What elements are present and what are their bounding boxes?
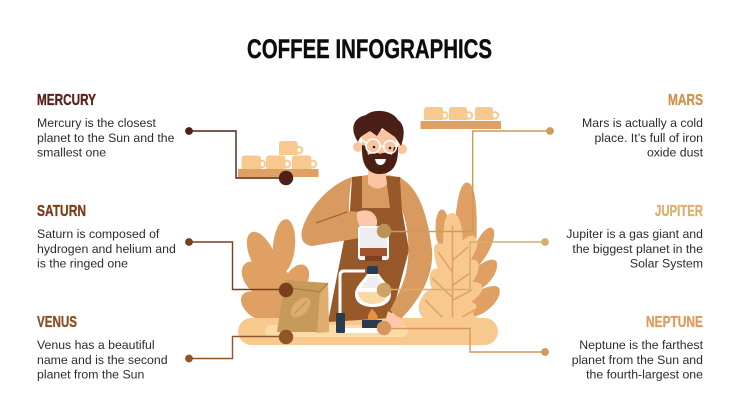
text block: Neptune: the fourth-largest one	[586, 368, 703, 382]
text block: Jupiter: Solar System	[630, 256, 703, 270]
illustration: right shelf with cups	[420, 107, 501, 129]
connector: Mercury	[186, 128, 293, 185]
text block: Venus	[37, 314, 168, 382]
neck	[368, 165, 387, 188]
text block: Saturn	[37, 203, 176, 270]
text block: Saturn: is the ringed one	[37, 256, 128, 270]
illustration: left plant	[235, 218, 315, 327]
text block: Saturn: Saturn is composed of	[37, 227, 160, 241]
face	[362, 130, 396, 172]
text block: Mercury: planet to the Sun and the	[37, 131, 175, 145]
ears	[353, 142, 363, 152]
left arm	[301, 177, 360, 246]
hair	[353, 111, 404, 146]
illustration: man	[301, 111, 432, 328]
apron	[328, 176, 409, 322]
text block: Jupiter: the biggest planet in the	[572, 242, 703, 256]
text block: Mercury	[37, 92, 175, 160]
illustration: left shelf with cups	[238, 141, 318, 177]
beard	[362, 145, 398, 174]
text block: Mars: oxide dust	[647, 146, 704, 160]
shirt torso	[350, 175, 402, 240]
title: COFFEE INFOGRAPHICS	[247, 34, 492, 64]
illustration: right plant back leaves	[437, 184, 498, 315]
text block: Venus: Venus has a beautiful	[37, 338, 155, 352]
text block: Saturn: hydrogen and helium and	[37, 242, 176, 256]
text block: Neptune: Neptune is the farthest	[579, 338, 704, 352]
text block: Jupiter: Jupiter is a gas giant and	[566, 227, 703, 241]
text block: Mars	[582, 92, 704, 160]
connector: Venus	[186, 330, 293, 362]
glasses	[360, 138, 396, 153]
text block: Neptune	[572, 314, 704, 382]
text block: Neptune: planet from the Sun and	[572, 353, 703, 367]
connector: Mars	[377, 128, 553, 238]
illustration: table	[238, 318, 498, 345]
text block: Venus: VENUS	[37, 314, 77, 331]
text block: Venus: planet from the Sun	[37, 368, 144, 382]
illustration: right plant front leaf	[421, 215, 480, 319]
text block: Saturn: SATURN	[37, 203, 86, 220]
text block: Neptune: NEPTUNE	[646, 314, 703, 331]
eyes	[373, 146, 375, 148]
connector: Jupiter	[377, 239, 548, 297]
text block: Mercury: Mercury is the closest	[37, 116, 156, 130]
illustration: coffee syphon	[336, 226, 391, 333]
text block: Mars: place. It’s full of iron	[595, 131, 703, 145]
text block: Venus: name and is the second	[37, 353, 168, 367]
right arm	[390, 178, 432, 320]
text block: Jupiter	[566, 203, 703, 270]
text block: Mars: Mars is actually a cold	[582, 116, 703, 130]
text block: Mercury: MERCURY	[37, 92, 96, 109]
connector: Saturn	[186, 239, 293, 297]
mouth	[375, 159, 386, 165]
connector: Neptune	[377, 321, 548, 355]
illustration: coffee bag	[277, 280, 329, 333]
text block: Mercury: smallest one	[37, 146, 106, 160]
hands	[357, 210, 377, 227]
text block: Jupiter: JUPITER	[655, 203, 703, 220]
arm crease	[316, 212, 347, 223]
text block: Mars: MARS	[668, 92, 703, 109]
